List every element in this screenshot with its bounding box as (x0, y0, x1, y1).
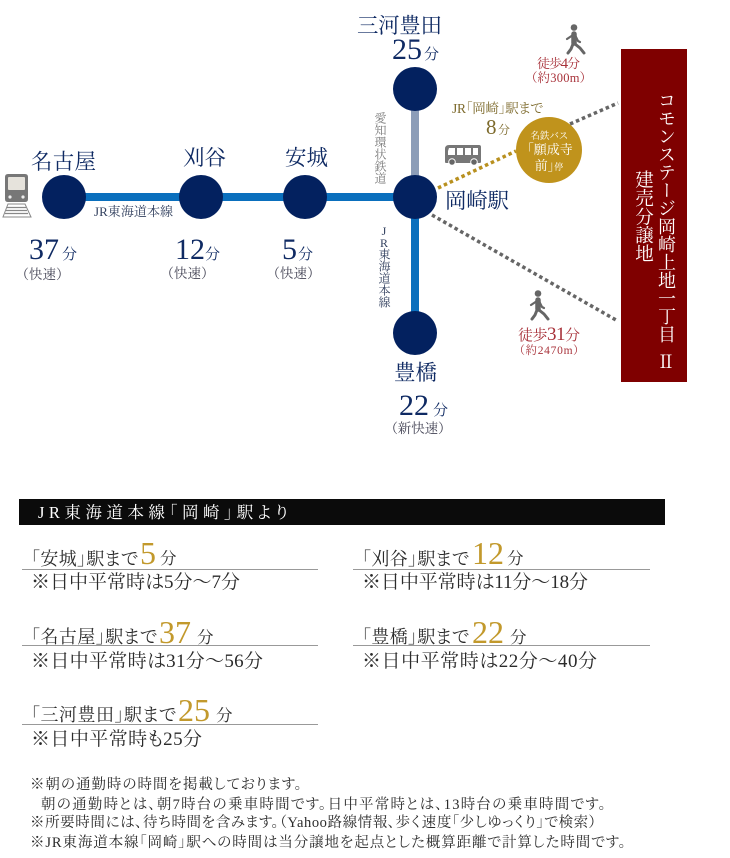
time entry: 安城: ※日中平常時は5分～7分 (31, 571, 240, 593)
bus stop badge (516, 117, 582, 183)
bus time label: 8 (486, 115, 496, 139)
station label: 三河豊田 (357, 14, 442, 66)
time entry: 刈谷 (353, 535, 650, 593)
station label: 安城: 5 (282, 233, 297, 266)
station: 刈谷 (179, 175, 223, 219)
walk label top (531, 56, 586, 85)
station label: 三河豊田: 三河豊田 (357, 14, 442, 38)
time entry: 三河豊田: 25 (178, 692, 210, 728)
footnotes (30, 775, 626, 851)
station label: 刈谷: 分 (205, 246, 220, 263)
station label: 豊橋 (391, 361, 448, 436)
station label: 豊橋: （新快速） (391, 420, 445, 436)
station label: 刈谷 (167, 146, 226, 281)
time entry: 名古屋: 分 (197, 628, 214, 647)
time entry: 名古屋 (22, 614, 318, 672)
station label: 岡崎駅: 岡崎駅 (445, 189, 509, 213)
station: 名古屋 (42, 175, 86, 219)
line label: JR東海道本線 vertical: R (380, 236, 388, 250)
walk label top: 徒歩4分 (537, 56, 580, 72)
line label: JR東海道本線: JR東海道本線 (94, 204, 173, 219)
walk label lower: 徒歩31分 (518, 324, 580, 345)
line: 愛知環状鉄道 (411, 89, 419, 197)
bus time label: 分 (498, 123, 510, 137)
route map (42, 67, 618, 355)
line label: JR東海道本線 vertical: J (382, 224, 387, 238)
walk label top: （約300m） (531, 71, 586, 85)
site name: コモンステージ岡崎上地一丁目 (656, 91, 676, 343)
walk label lower (518, 324, 580, 357)
station label: 名古屋 (22, 150, 96, 282)
station label: 安城 (273, 146, 328, 281)
time entry: 刈谷: ※日中平常時は11分～18分 (362, 571, 588, 593)
time entry: 豊橋: 分 (510, 628, 527, 647)
time entry: 三河豊田 (22, 692, 318, 750)
time entry: 刈谷: 分 (507, 549, 524, 568)
station: 豊橋 (393, 311, 437, 355)
station label: 名古屋: 分 (62, 246, 77, 263)
time entry: 安城: 分 (160, 549, 177, 568)
time entry: 三河豊田: 「三河豊田」駅まで (31, 705, 176, 725)
station label: 安城: 分 (298, 246, 313, 263)
time entry: 安城 (22, 535, 318, 593)
time entry: 三河豊田: 分 (216, 706, 233, 725)
dotted route: station to site (432, 215, 616, 320)
bus stop badge: 「願成寺 (527, 142, 573, 157)
station label: 名古屋: （快速） (22, 266, 63, 282)
dotted route: bus stop to site (570, 103, 618, 124)
station label: 刈谷: （快速） (167, 265, 208, 281)
station label: 三河豊田: 25 (392, 33, 422, 66)
station label: 刈谷: 12 (175, 233, 205, 266)
line: JR東海道本線 horizontal (64, 193, 415, 201)
station label: 豊橋: 22 (399, 389, 429, 422)
station label: 豊橋: 豊橋 (394, 361, 437, 385)
site type: 建売分譲地 (632, 170, 654, 262)
time entry: 豊橋: 「豊橋」駅まで (362, 627, 469, 647)
footnotes: 朝の通勤時とは、朝7時台の乗車時間です。日中平常時とは、13時台の乗車時間です。 (41, 795, 606, 813)
icon: train (3, 174, 31, 217)
line: JR東海道本線 vertical (411, 197, 419, 333)
time entry: 名古屋: 37 (159, 614, 191, 650)
heading bar (19, 499, 665, 525)
station label: 刈谷: 刈谷 (183, 146, 226, 170)
icon: walker lower (531, 290, 548, 319)
footnotes: ※朝の通勤時の時間を掲載しております。 (30, 775, 302, 793)
walk label lower: （約2470m） (519, 344, 579, 357)
site panel (621, 49, 687, 382)
time entry: 豊橋 (353, 614, 650, 672)
station label: 安城: 安城 (285, 146, 328, 170)
icon: walker top (567, 24, 584, 53)
dotted route: bus to station (438, 151, 516, 188)
bus stop badge: 前」停 (535, 158, 563, 173)
site name: Ⅱ (657, 352, 675, 372)
footnotes: ※所要時間には、待ち時間を含みます。（Yahoo路線情報、歩く速度「少しゆっくり」で検索） (30, 813, 596, 831)
station label: 名古屋: 37 (29, 233, 59, 266)
time entry: 刈谷: 「刈谷」駅まで (362, 549, 469, 569)
station label: 三河豊田: 分 (424, 46, 439, 63)
time entry: 安城: 「安城」駅まで (31, 548, 138, 569)
bus time label (452, 100, 543, 139)
footnotes: ※JR東海道本線「岡崎」駅への時間は当分譲地を起点とした概算距離で計算した時間です。 (30, 833, 626, 851)
line label: 愛知環状鉄道: 愛知環状鉄道 (373, 112, 387, 185)
time entry: 豊橋: 22 (472, 614, 504, 650)
station label: 豊橋: 分 (433, 402, 448, 419)
time entry: 名古屋: 「名古屋」駅まで (31, 627, 157, 647)
line label: JR東海道本線 vertical: 東海道本線 (377, 248, 391, 308)
bus stop badge: 名鉄バス (530, 130, 568, 142)
time entry: 名古屋: ※日中平常時は31分～56分 (31, 650, 263, 672)
bus time label: JR「岡崎」駅まで (452, 100, 543, 116)
time entry: 刈谷: 12 (472, 535, 504, 571)
station: 三河豊田 (393, 67, 437, 111)
station: 岡崎 (393, 175, 437, 219)
station: 安城 (283, 175, 327, 219)
heading bar: JR東海道本線「岡崎」駅より (38, 503, 288, 522)
station label: 安城: （快速） (273, 265, 314, 281)
time entry: 三河豊田: ※日中平常時も25分 (31, 728, 202, 750)
station label: 名古屋: 名古屋 (31, 150, 96, 174)
icon: bus (445, 145, 481, 165)
time entry: 豊橋: ※日中平常時は22分～40分 (362, 650, 597, 672)
time entry: 安城: 5 (140, 535, 156, 571)
